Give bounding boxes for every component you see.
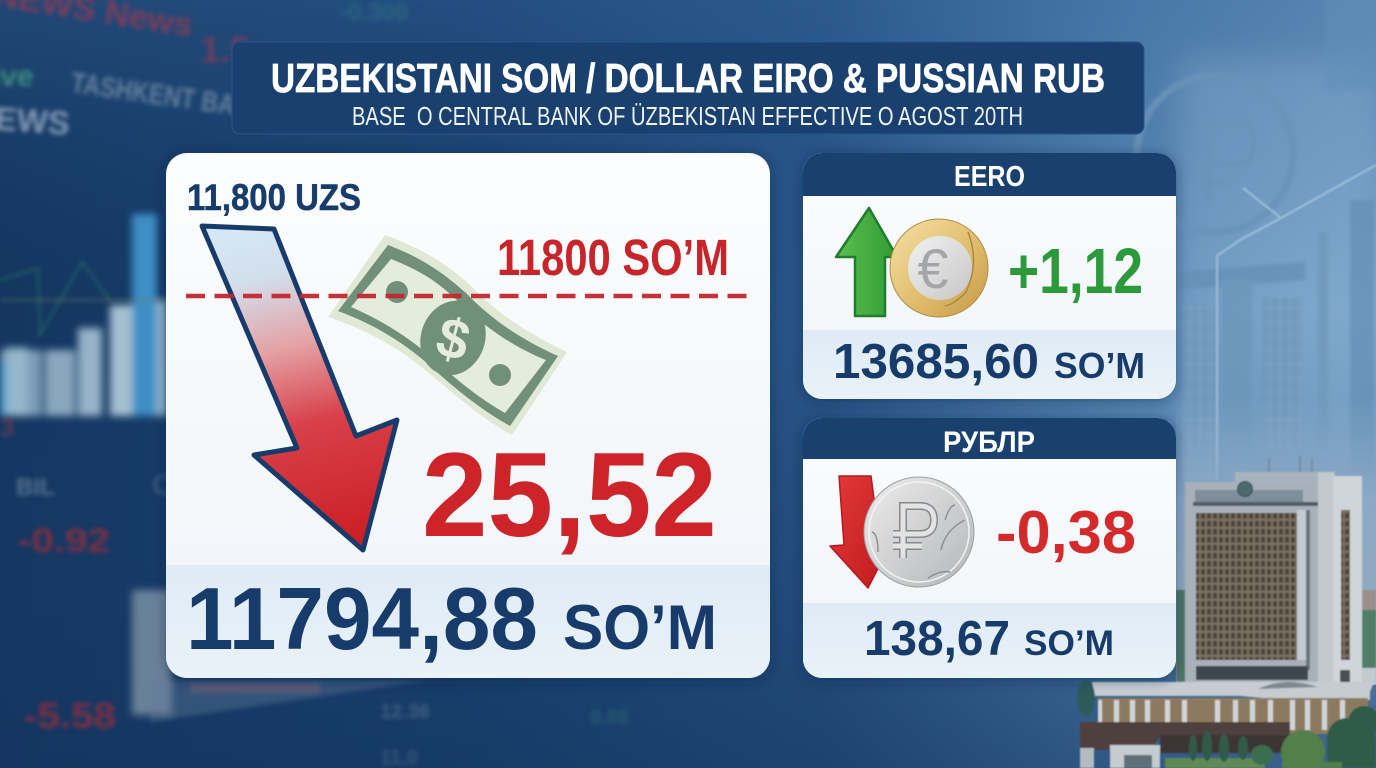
rouble rate: SO’M <box>1024 624 1114 663</box>
background: blurred ticker board: TASHKENT BA <box>69 67 237 122</box>
photo: government building <box>1077 400 1376 768</box>
icon: rouble coin <box>864 477 974 587</box>
current dollar rate: SO’M <box>563 593 717 663</box>
euro rate <box>833 335 1145 389</box>
rate reference dashed line <box>186 294 748 298</box>
background: blurred ticker board: -0.92 <box>18 522 110 560</box>
background: blurred ticker board: 12.36 <box>380 701 430 723</box>
background: blurred ticker board <box>0 0 629 768</box>
panel: rouble <box>803 418 1176 678</box>
icon: euro coin: € <box>917 237 949 300</box>
title: UZBEKISTANI SOM / DOLLAR EIRO & PUSSIAN RUB <box>271 55 1105 101</box>
tower <box>1185 456 1362 684</box>
icon: euro coin <box>890 219 988 317</box>
icon: dollar banknote: $ <box>430 304 477 373</box>
panel: US dollar main <box>166 153 770 678</box>
podium <box>1080 682 1374 768</box>
rouble header: РУБЛР <box>943 426 1035 459</box>
rouble change: -0,38 <box>996 499 1136 566</box>
rouble rate: 138,67 <box>864 612 1010 666</box>
header banner <box>232 42 1144 134</box>
label: previous rate: 11,800 UZS <box>187 177 361 218</box>
background: blurred ticker board: 0.88 <box>590 707 629 729</box>
background: blurred ticker board: C <box>152 469 174 502</box>
background: blurred ticker board: 1.5 <box>200 29 250 70</box>
icon: green up arrow <box>836 208 897 316</box>
subtitle: BASE O CENTRAL BANK OF ÜZBEKISTAN EFFECTIVE O AGOST 20TH <box>352 101 1023 131</box>
background: blurred ticker board: 3 <box>0 412 14 442</box>
icon: falling arrow <box>202 226 397 550</box>
background: faded central bank facade and rouble seal <box>1137 0 1376 480</box>
trees <box>1077 680 1376 768</box>
current dollar rate <box>186 569 717 668</box>
euro rate: SO’M <box>1054 345 1145 386</box>
current dollar rate: 11794,88 <box>186 569 538 668</box>
icon: dollar banknote <box>328 235 567 435</box>
euro header <box>803 153 1176 196</box>
icon: red down arrow <box>830 476 890 588</box>
euro change: +1,12 <box>1008 235 1143 307</box>
label: reference rate: 11800 SO’M <box>497 229 729 286</box>
rouble rate <box>864 612 1114 666</box>
euro header: EERO <box>954 161 1025 193</box>
rouble header <box>803 418 1176 459</box>
background: blurred ticker board: -5.58 <box>24 695 116 736</box>
euro rate: 13685,60 <box>833 335 1039 389</box>
background: blurred ticker board: BIL <box>16 474 55 501</box>
panel: euro <box>803 153 1176 399</box>
change value: 25,52 <box>422 428 717 562</box>
